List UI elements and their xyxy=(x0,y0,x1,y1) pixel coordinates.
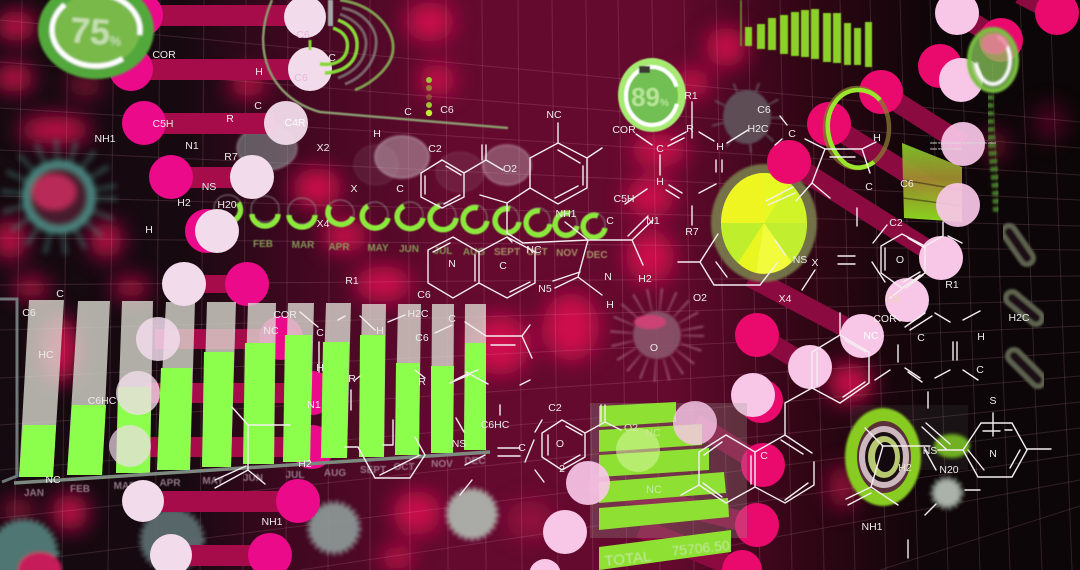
molecule labels, centre: X xyxy=(350,183,358,195)
molecule labels, right: R7 xyxy=(685,226,699,238)
chart frame xyxy=(0,299,17,482)
molecule labels, right: O xyxy=(650,342,658,354)
molecule labels, centre: NH1 xyxy=(261,516,283,528)
month labels: JUN xyxy=(399,244,419,255)
month labels: OCT xyxy=(526,247,548,258)
chart month labels: JUN xyxy=(243,473,263,484)
molecule labels, right: C xyxy=(788,128,796,140)
chart month labels: MAY xyxy=(202,476,224,487)
molecule: hexagon O upper right xyxy=(881,222,962,298)
bacteria capsules, right xyxy=(1009,232,1038,380)
molecule labels, right: C xyxy=(976,364,984,376)
month labels: MAR xyxy=(292,240,315,251)
molecule labels, left: C xyxy=(328,52,336,64)
green panel: right striped xyxy=(902,143,962,222)
molecule: dashed hexagon right xyxy=(875,311,980,408)
molecule labels, centre: X4 xyxy=(317,218,330,230)
chart month labels: AUG xyxy=(324,468,346,479)
molecule labels, right: C2 xyxy=(548,402,562,414)
pie chart xyxy=(711,164,817,282)
molecule labels, centre: H xyxy=(373,128,381,140)
gauge: 75 percent: 75% xyxy=(69,9,124,54)
molecule labels, left: C6 xyxy=(296,29,310,41)
month labels xyxy=(253,239,608,261)
molecule: lower centre on bars xyxy=(215,342,425,488)
molecule labels, right: C xyxy=(656,143,664,155)
bar fills xyxy=(19,335,486,477)
molecule labels, right: NH1 xyxy=(861,521,883,533)
molecule labels, left: H2 xyxy=(177,197,191,209)
molecule labels, centre: NH1 xyxy=(555,208,577,220)
total label: TOTAL xyxy=(604,548,652,570)
molecule labels, right: O xyxy=(556,438,564,450)
molecule labels, centre: NS xyxy=(452,438,466,450)
molecule labels, centre: C xyxy=(606,215,614,227)
molecule labels, centre: C6HC xyxy=(481,419,510,431)
virus: centre with spikes xyxy=(621,299,693,371)
month labels: APR xyxy=(328,242,350,253)
molecule labels, centre: C6 xyxy=(417,289,431,301)
molecule labels, centre: C xyxy=(316,327,324,339)
molecule labels, left: C xyxy=(254,100,262,112)
molecule labels, right: X4 xyxy=(779,293,792,305)
molecule labels, right: H xyxy=(716,141,724,153)
chart month labels xyxy=(24,456,486,499)
molecule labels, right: NS xyxy=(923,445,937,457)
molecule labels, right: COR xyxy=(612,124,636,136)
gauge: 89 percent: 89% xyxy=(631,82,669,112)
gauge: 75 percent xyxy=(38,0,154,79)
molecule labels, centre: C xyxy=(518,442,526,454)
molecule labels, right: H xyxy=(606,299,614,311)
molecule labels, left: NS xyxy=(202,181,216,193)
molecule labels, right: S xyxy=(989,395,997,407)
molecule labels, left: H20 xyxy=(217,199,237,211)
molecule labels, centre: R xyxy=(348,373,356,385)
molecule labels, left: NC xyxy=(45,474,61,486)
molecule labels, right: C6 xyxy=(757,104,771,116)
panel: bottom totals bars xyxy=(590,402,747,570)
molecule labels, right: H2C xyxy=(747,123,769,135)
molecule: big centre ring chain xyxy=(681,313,869,503)
molecule labels, right: C xyxy=(760,450,768,462)
molecule labels, centre: H xyxy=(316,362,324,374)
molecule labels, left: C5H xyxy=(152,118,174,130)
molecule line structures xyxy=(215,102,1051,558)
diagonal crimson bars, right xyxy=(588,0,1057,570)
virus: bottom row xyxy=(0,479,961,570)
month rings row xyxy=(214,195,605,237)
molecule labels, left: C6 xyxy=(22,307,36,319)
molecule labels, centre: N1 xyxy=(307,399,321,411)
molecule labels, centre: N xyxy=(604,271,612,283)
month labels: MAY xyxy=(367,243,389,254)
molecule labels, right: H2C xyxy=(1008,312,1030,324)
green dotted chain xyxy=(990,95,997,212)
molecule labels, centre: H2 xyxy=(298,458,312,470)
molecule labels, right: O2 xyxy=(693,292,707,304)
molecule labels, left xyxy=(22,29,336,486)
molecule labels, left: HC xyxy=(38,349,54,361)
month labels: JUL xyxy=(434,246,452,257)
white ends, right helix xyxy=(731,0,985,417)
molecule labels, right: R1 xyxy=(684,90,698,102)
molecule labels, centre: C6 xyxy=(440,104,454,116)
molecule labels, right: 2 xyxy=(559,463,565,475)
molecule labels, left: C6HC xyxy=(88,395,117,407)
chart month labels: FEB xyxy=(70,484,90,495)
bar chart: top right green xyxy=(741,0,872,67)
molecule labels, right: X xyxy=(811,257,819,269)
molecule labels, left: COR xyxy=(152,49,176,61)
dumbbells, left upper xyxy=(109,0,334,469)
arc gauge, top centre xyxy=(263,0,508,128)
molecule labels, left: N1 xyxy=(185,140,199,152)
molecule: hexagon O lower left xyxy=(535,405,621,482)
chart month labels: NOV xyxy=(431,459,453,470)
pink ends, right helix xyxy=(722,0,1079,570)
green ring xyxy=(825,88,889,168)
green blob, lower right xyxy=(934,434,970,458)
chart baseline xyxy=(14,452,490,483)
molecule labels, centre: N5 xyxy=(538,283,552,295)
molecule labels, right: H xyxy=(977,331,985,343)
molecule labels, right: C5H xyxy=(613,193,635,205)
white dumbbell ends, left xyxy=(109,0,332,570)
molecule labels, right: COR xyxy=(873,313,897,325)
month labels: DEC xyxy=(586,250,608,261)
molecule labels, left: R7 xyxy=(224,151,238,163)
molecule labels, centre: NC xyxy=(526,244,542,256)
chart month labels: MAR xyxy=(114,481,137,492)
molecule labels, centre: N1 xyxy=(646,215,660,227)
molecule labels, centre: C6 xyxy=(415,332,429,344)
chart month labels: JUL xyxy=(286,470,304,481)
molecule labels, right: C xyxy=(917,332,925,344)
molecule labels, right xyxy=(548,90,1030,533)
chart month labels: JAN xyxy=(24,488,44,499)
molecule labels, right: H xyxy=(656,176,664,188)
molecule labels, right: H2 xyxy=(898,462,912,474)
virus: large teal, left xyxy=(14,152,104,242)
molecule labels, centre: C2 xyxy=(428,143,442,155)
molecule labels, left: H xyxy=(255,66,263,78)
month labels: AUG xyxy=(463,247,485,258)
molecule labels, right: N xyxy=(989,448,997,460)
month labels: NOV xyxy=(556,248,578,259)
molecule labels, centre xyxy=(261,104,660,528)
molecule labels, right: C xyxy=(865,181,873,193)
molecule: top centre rings xyxy=(421,145,503,208)
molecule labels, left: NH1 xyxy=(94,133,116,145)
bar tracks xyxy=(19,300,486,477)
molecule labels, centre: X2 xyxy=(317,142,330,154)
molecule labels, right: N20 xyxy=(939,464,959,476)
molecule labels, centre: C xyxy=(499,260,507,272)
molecule labels, left: R xyxy=(226,113,234,125)
molecule labels, centre: COR xyxy=(273,309,297,321)
panel: bottom totals bars: 75706.50 xyxy=(671,537,731,559)
molecule labels, left: C4R xyxy=(284,117,306,129)
bar chart: monthly bars xyxy=(0,299,490,499)
molecule labels, right: C6 xyxy=(900,178,914,190)
green dot column xyxy=(426,77,432,116)
month labels: FEB xyxy=(253,239,273,250)
chart month labels: DEC xyxy=(464,456,486,467)
chart month labels: APR xyxy=(159,478,181,489)
chart month labels: OCT xyxy=(393,462,415,473)
molecule labels, centre: H2 xyxy=(638,273,652,285)
molecule: hexagon N, lower right xyxy=(846,413,1051,558)
molecule labels, centre: C xyxy=(396,183,404,195)
molecule labels, centre: R1 xyxy=(345,275,359,287)
molecule labels, right: C2 xyxy=(889,217,903,229)
molecule labels, centre: R xyxy=(418,376,426,388)
dumbbells, lower xyxy=(160,479,320,570)
virus: mite, upper right centre xyxy=(717,87,777,147)
molecule labels, right: NS xyxy=(793,254,807,266)
target gauge xyxy=(845,405,968,506)
molecule labels, right: NC xyxy=(863,330,879,342)
molecule: 89 gauge branch xyxy=(625,102,787,225)
molecule labels, right: O xyxy=(896,254,904,266)
molecule labels, right: H xyxy=(873,132,881,144)
molecule labels, right: C4 xyxy=(886,293,900,305)
white ends over bottom panel xyxy=(529,401,717,570)
molecule labels, right: R1 xyxy=(945,279,959,291)
small top-right gauge xyxy=(969,29,1017,91)
molecule labels, right: NC xyxy=(645,427,661,439)
molecule labels, left: C6 xyxy=(294,72,308,84)
molecule labels, centre: C xyxy=(404,106,412,118)
translucent cells xyxy=(237,126,531,192)
molecule labels, centre: NC xyxy=(263,325,279,337)
molecule labels, centre: NC xyxy=(546,109,562,121)
molecule labels, right: R xyxy=(686,123,694,135)
molecule labels, centre: H2C xyxy=(407,308,429,320)
chart month labels: SEPT xyxy=(360,465,386,476)
tiny panel text: data readout sample xyxy=(930,147,962,151)
gauge: 89 percent xyxy=(618,58,686,132)
molecule labels, right: O2 xyxy=(624,422,638,434)
molecule labels, left: H xyxy=(145,224,153,236)
molecule labels, centre: N xyxy=(448,258,456,270)
month labels: SEPT xyxy=(494,247,520,258)
molecule labels, centre: H xyxy=(376,325,384,337)
molecule labels, centre: C xyxy=(448,313,456,325)
tiny panel text xyxy=(930,141,996,151)
molecule labels, left: C xyxy=(56,288,64,300)
molecule labels, centre: O2 xyxy=(503,163,517,175)
panel: bottom totals bars: NC xyxy=(646,484,662,496)
tiny panel text: data readout sample analysis results value xyxy=(930,141,996,145)
molecule: around pie xyxy=(766,139,876,226)
